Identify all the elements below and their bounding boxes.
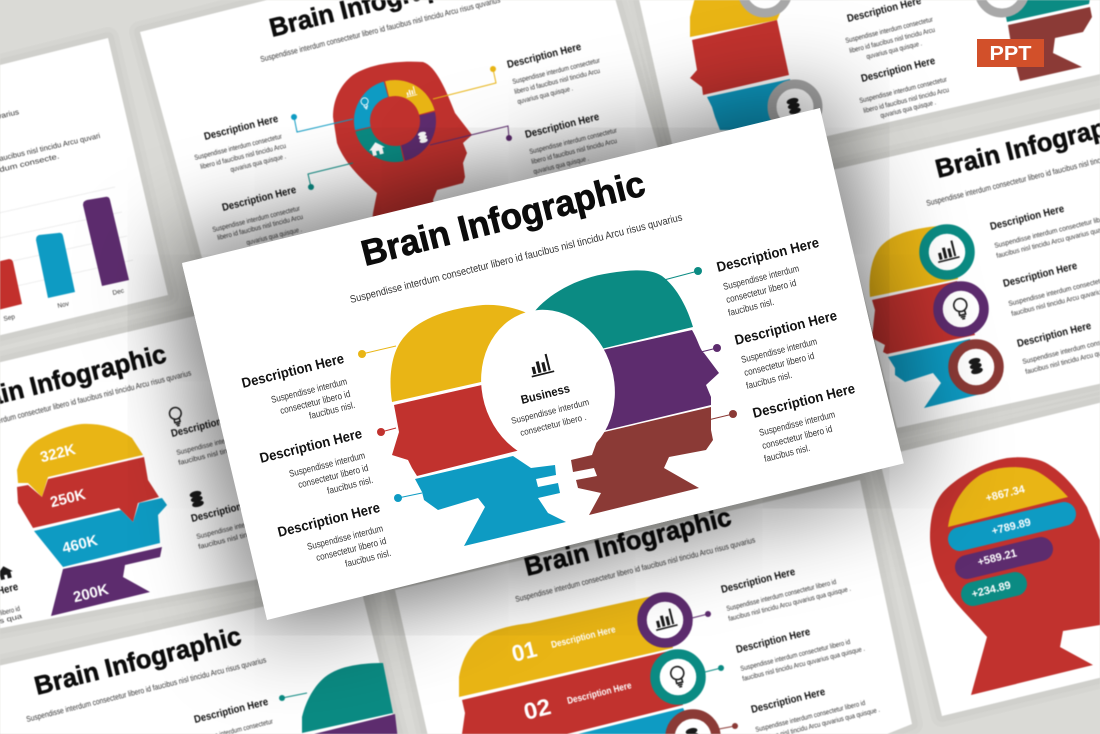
- text: yellow item: quvarius qua quisque .: [517, 85, 574, 106]
- description right 1: Suspendisse interdum: [722, 263, 800, 293]
- band: purple: [580, 330, 719, 434]
- rings: [642, 597, 716, 734]
- description left 1: consectetur libero id: [279, 389, 352, 417]
- description left 3: faucibus nisl.: [344, 548, 392, 570]
- description right 2: [733, 307, 839, 392]
- connectors: [362, 271, 733, 498]
- description left 2: consectetur libero id: [297, 463, 370, 491]
- subtitle: Suspendisse interdum consectetur libero id faucibus nisl tincidu Arcu risus quvarius: [514, 535, 756, 604]
- head bands: [302, 663, 398, 734]
- value pills: [960, 514, 1064, 594]
- values: +589.21: [976, 547, 1018, 569]
- descriptions: Description Here: [1016, 320, 1093, 350]
- text: purple item: Suspendisse interdum consectetur: [529, 127, 618, 156]
- descriptions: quvarius qua quisque .: [866, 40, 923, 61]
- band values: 322K: [38, 441, 78, 466]
- text: purple item: [524, 111, 618, 176]
- side descriptions: Suspendisse interdum consectetur libero id: [176, 420, 299, 457]
- descriptions: Description Here: [860, 55, 937, 85]
- descriptions: faucibus nisl tincidu Arcu quvarius qua quisque .: [728, 586, 852, 623]
- text: blue item: Description Here: [203, 113, 280, 143]
- text: yellow item: Description Here: [506, 41, 583, 71]
- description right 2: consectetur libero id: [743, 351, 816, 379]
- text: teal item: [212, 184, 304, 247]
- text: yellow item: [506, 41, 601, 106]
- text: purple item: quvarius qua quisque .: [533, 155, 590, 176]
- slide: head with speech values left: [0, 310, 321, 633]
- slide: head with value pills: [879, 393, 1100, 716]
- bar: September: [0, 259, 22, 310]
- center label: consectetur libero .: [519, 412, 587, 438]
- descriptions: [989, 203, 1100, 376]
- descriptions: Suspendisse interdum consectetur: [845, 16, 934, 45]
- text: purple item: libero id faucibus nisl tincidu Arcu: [531, 138, 618, 166]
- main slide shadow: [182, 109, 904, 618]
- descriptions: Suspendisse interdum consectetur libero id: [726, 579, 837, 613]
- right head bands: [979, 0, 1092, 81]
- side descriptions: Suspendisse interdum consectetur libero id: [196, 504, 319, 541]
- band: teal: [534, 270, 693, 349]
- side descriptions: Description Here: [190, 495, 267, 525]
- descriptions: Description Here: [989, 203, 1066, 233]
- description right 2: faucibus nisl.: [745, 370, 793, 392]
- band labels: Description Here: [550, 624, 617, 651]
- descriptions: Suspendisse interdum consectetur libero id: [740, 639, 851, 673]
- side descriptions: faucibus nisl tincidu Arcu quvarius qua: [178, 430, 301, 467]
- slide: stacked heads top right: [630, 0, 1100, 170]
- description left 1: Suspendisse interdum: [270, 376, 348, 406]
- title: Brain Infographic: [521, 501, 734, 582]
- description right 2: Suspendisse interdum: [740, 336, 818, 366]
- description right 1: faucibus nisl.: [727, 297, 775, 319]
- title: Brain Infographic: [357, 163, 649, 274]
- text: teal item: libero id faucibus nisl tincidu Arcu: [217, 214, 304, 242]
- bar: November: [36, 233, 75, 298]
- title: Brain Infographic: [31, 620, 244, 701]
- text: blue item: libero id faucibus nisl tincidu Arcu: [200, 143, 287, 171]
- values: +234.89: [970, 579, 1012, 601]
- subtitle: Suspendisse interdum consectetur libero id faucibus nisl tincidu Arcu risus quvarius: [25, 655, 267, 724]
- axis labels: Dec: [112, 287, 125, 297]
- descriptions: libero id faucibus nisl tincidu Arcu: [863, 87, 950, 115]
- center label: [510, 381, 590, 438]
- text: yellow item: libero id faucibus nisl tincidu Arcu: [514, 68, 601, 96]
- description right 1: consectetur libero id: [725, 278, 798, 306]
- descriptions: faucibus nisl tincidu Arcu quvarius qua quisque .: [742, 646, 866, 683]
- main slide: [182, 108, 902, 620]
- head bands: [870, 225, 985, 408]
- band values: 250K: [48, 486, 88, 511]
- description: Description Here: [193, 696, 270, 726]
- description right 1: Description Here: [715, 234, 821, 275]
- subtitle: Suspendisse interdum consectetur libero id faucibus nisl tincidu Arcu risus quvarius: [349, 212, 684, 306]
- descriptions: Description Here: [750, 686, 827, 716]
- axis labels: Nov: [57, 300, 70, 310]
- icon: bar chart: [527, 353, 554, 378]
- text: teal item: Suspendisse interdum consectetur: [212, 205, 301, 234]
- descriptions: libero id faucibus nisl tincidu Arcu: [849, 27, 936, 55]
- left head bands: [690, 0, 818, 130]
- center label: Business: [519, 381, 572, 407]
- band labels: [509, 624, 633, 725]
- donut ring: [355, 81, 435, 161]
- center bulb: [463, 294, 633, 478]
- head bands: [459, 595, 700, 734]
- axis labels: Sep: [3, 313, 16, 323]
- band: blue: [415, 456, 566, 546]
- description left 2: Suspendisse interdum: [288, 450, 366, 480]
- donut icons: [360, 86, 428, 157]
- head silhouette: [930, 457, 1100, 695]
- descriptions: Description Here: [720, 566, 797, 596]
- connector dots: [358, 267, 737, 502]
- description: [185, 696, 274, 734]
- description left 1: [240, 350, 356, 422]
- description left 3: Description Here: [276, 499, 382, 540]
- description right 3: [751, 380, 857, 465]
- band labels: Description Here: [566, 680, 633, 707]
- slide: head with donut: [140, 0, 690, 360]
- description left 1: faucibus nisl.: [308, 400, 356, 422]
- descriptions: Suspendisse interdum consectetur: [859, 76, 948, 105]
- text: blue item: Suspendisse interdum consectetur: [194, 133, 283, 162]
- side descriptions: faucibus nisl tincidu Arcu quvarius qua: [198, 514, 321, 551]
- head silhouette: [333, 62, 472, 240]
- band values: [38, 441, 111, 606]
- center label: Suspendisse interdum: [510, 397, 590, 426]
- description right 3: consectetur libero id: [761, 424, 834, 452]
- text: blue item: [194, 113, 287, 174]
- band: brown: [571, 407, 713, 515]
- slide: numbered head bottom: [395, 480, 912, 734]
- description left 2: Description Here: [258, 425, 364, 466]
- connector dots: [692, 611, 738, 729]
- description left 1: Description Here: [240, 350, 346, 391]
- description right 3: Description Here: [751, 380, 857, 421]
- band: red: [392, 374, 560, 476]
- right head: [534, 270, 719, 515]
- band values: 460K: [60, 532, 100, 557]
- description left 2: [258, 425, 374, 497]
- descriptions: Suspendisse interdum consectetur libero id: [755, 700, 866, 734]
- description right 1: [715, 234, 821, 319]
- yellow cap: [948, 467, 1068, 527]
- slide: heads with rings right: [832, 100, 1100, 428]
- text: teal item: quvarius qua quisque .: [246, 226, 303, 247]
- band: yellow: [391, 305, 560, 402]
- ring icons: [924, 229, 999, 390]
- head bands: [17, 424, 167, 616]
- description left 2: faucibus nisl.: [326, 475, 374, 497]
- values: +867.34: [984, 483, 1027, 505]
- description left 3: consectetur libero id: [315, 536, 388, 564]
- band labels: 02: [521, 693, 553, 725]
- values: [970, 483, 1032, 601]
- descriptions: Description Here: [1002, 260, 1079, 290]
- description right 2: Description Here: [733, 307, 839, 348]
- text: teal item: Description Here: [221, 184, 298, 214]
- axis labels: [3, 287, 125, 323]
- band labels: 01: [509, 636, 540, 667]
- left head: [391, 305, 566, 546]
- descriptions: quvarius qua quisque .: [880, 99, 937, 120]
- descriptions: [845, 0, 950, 120]
- description right 3: faucibus nisl.: [763, 443, 811, 465]
- side icons: [0, 406, 205, 581]
- slide: bar chart: [0, 38, 168, 340]
- description left 3: Suspendisse interdum: [306, 523, 384, 553]
- PPT badge: PPT: [990, 43, 1032, 65]
- values: +789.89: [990, 516, 1032, 538]
- text: purple item: Description Here: [524, 111, 601, 141]
- text: blue item: quvarius qua quisque .: [230, 153, 287, 174]
- PPT badge: [977, 39, 1044, 67]
- descriptions: [720, 566, 881, 734]
- band values: 200K: [71, 581, 111, 606]
- descriptions: Description Here: [735, 626, 812, 656]
- connectors: [294, 69, 509, 187]
- text: yellow item: Suspendisse interdum consectetur: [512, 57, 601, 86]
- slide: bottom left: [0, 585, 400, 734]
- side descriptions: [0, 410, 321, 633]
- connector: [279, 693, 307, 701]
- side descriptions: Description Here: [170, 410, 247, 440]
- bar: December: [83, 197, 129, 286]
- description right 3: Suspendisse interdum: [758, 409, 836, 439]
- description left 3: [276, 499, 392, 570]
